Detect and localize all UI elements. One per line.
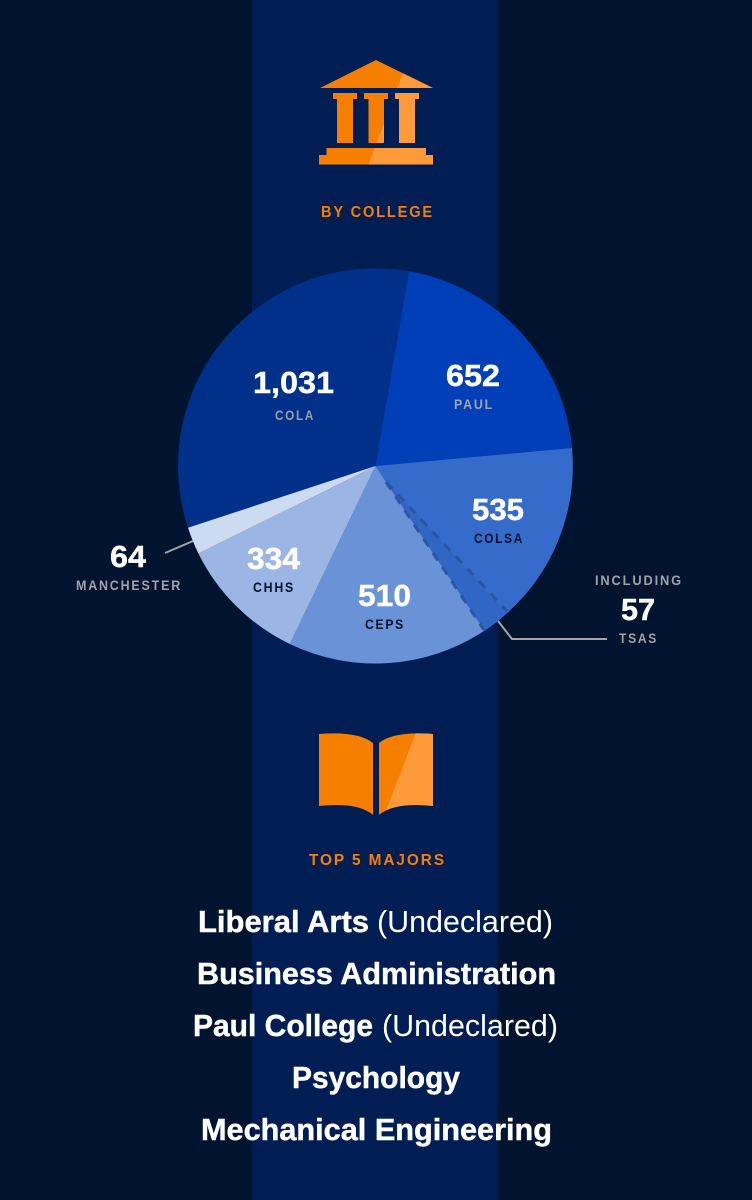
heading: by college: BY COLLEGE <box>321 204 434 221</box>
callout: TSAS: 57 <box>621 592 655 627</box>
label: CEPS value: CEPS <box>365 616 405 632</box>
major 3: (Undeclared) <box>382 1008 558 1043</box>
major 3: Paul College <box>193 1008 373 1043</box>
label: COLSA value: COLSA <box>474 530 524 546</box>
heading: top 5 majors: TOP 5 MAJORS <box>309 852 446 869</box>
label: COLSA value <box>472 492 524 546</box>
major 5: Mechanical Engineering <box>201 1112 552 1147</box>
icon: institution building <box>319 60 440 166</box>
pie chart: enrollment by college <box>178 268 573 664</box>
major 3 <box>193 1008 558 1043</box>
label: COLA value: COLA <box>275 407 315 423</box>
slice: CHHS <box>198 466 376 644</box>
slice: COLA <box>178 268 409 528</box>
major 4: Psychology <box>292 1060 461 1095</box>
label: CHHS value: 334 <box>247 541 301 576</box>
callout: Manchester: 64 <box>110 539 147 574</box>
callout: TSAS <box>498 572 683 646</box>
callout: Manchester: MANCHESTER <box>76 577 182 593</box>
major 1 <box>198 904 553 939</box>
slice: TSAS portion of COLSA <box>383 477 507 631</box>
slice: CEPS <box>290 466 484 664</box>
callout: TSAS: TSAS <box>619 630 658 646</box>
label: PAUL value <box>446 358 500 412</box>
callout: Manchester <box>76 539 193 593</box>
slice: Manchester <box>188 466 376 554</box>
label: PAUL value: PAUL <box>454 396 494 412</box>
label: CEPS value <box>358 578 411 632</box>
label: COLA value: 1,031 <box>253 365 334 400</box>
label: CEPS value: 510 <box>358 578 411 613</box>
major 2: Business Administration <box>197 956 556 991</box>
label: CHHS value <box>247 541 301 595</box>
major 1: (Undeclared) <box>377 904 553 939</box>
slice: PAUL <box>376 271 572 466</box>
label: COLA value <box>253 365 334 423</box>
major 1: Liberal Arts <box>198 904 369 939</box>
list: top 5 majors <box>193 904 558 1147</box>
label: COLSA value: 535 <box>472 492 524 527</box>
label: CHHS value: CHHS <box>253 579 295 595</box>
dashed lines: TSAS boundary <box>386 482 507 630</box>
label: PAUL value: 652 <box>446 358 500 393</box>
slice: COLSA <box>376 448 573 631</box>
icon: open book <box>319 730 436 816</box>
callout: TSAS: INCLUDING <box>595 572 683 588</box>
